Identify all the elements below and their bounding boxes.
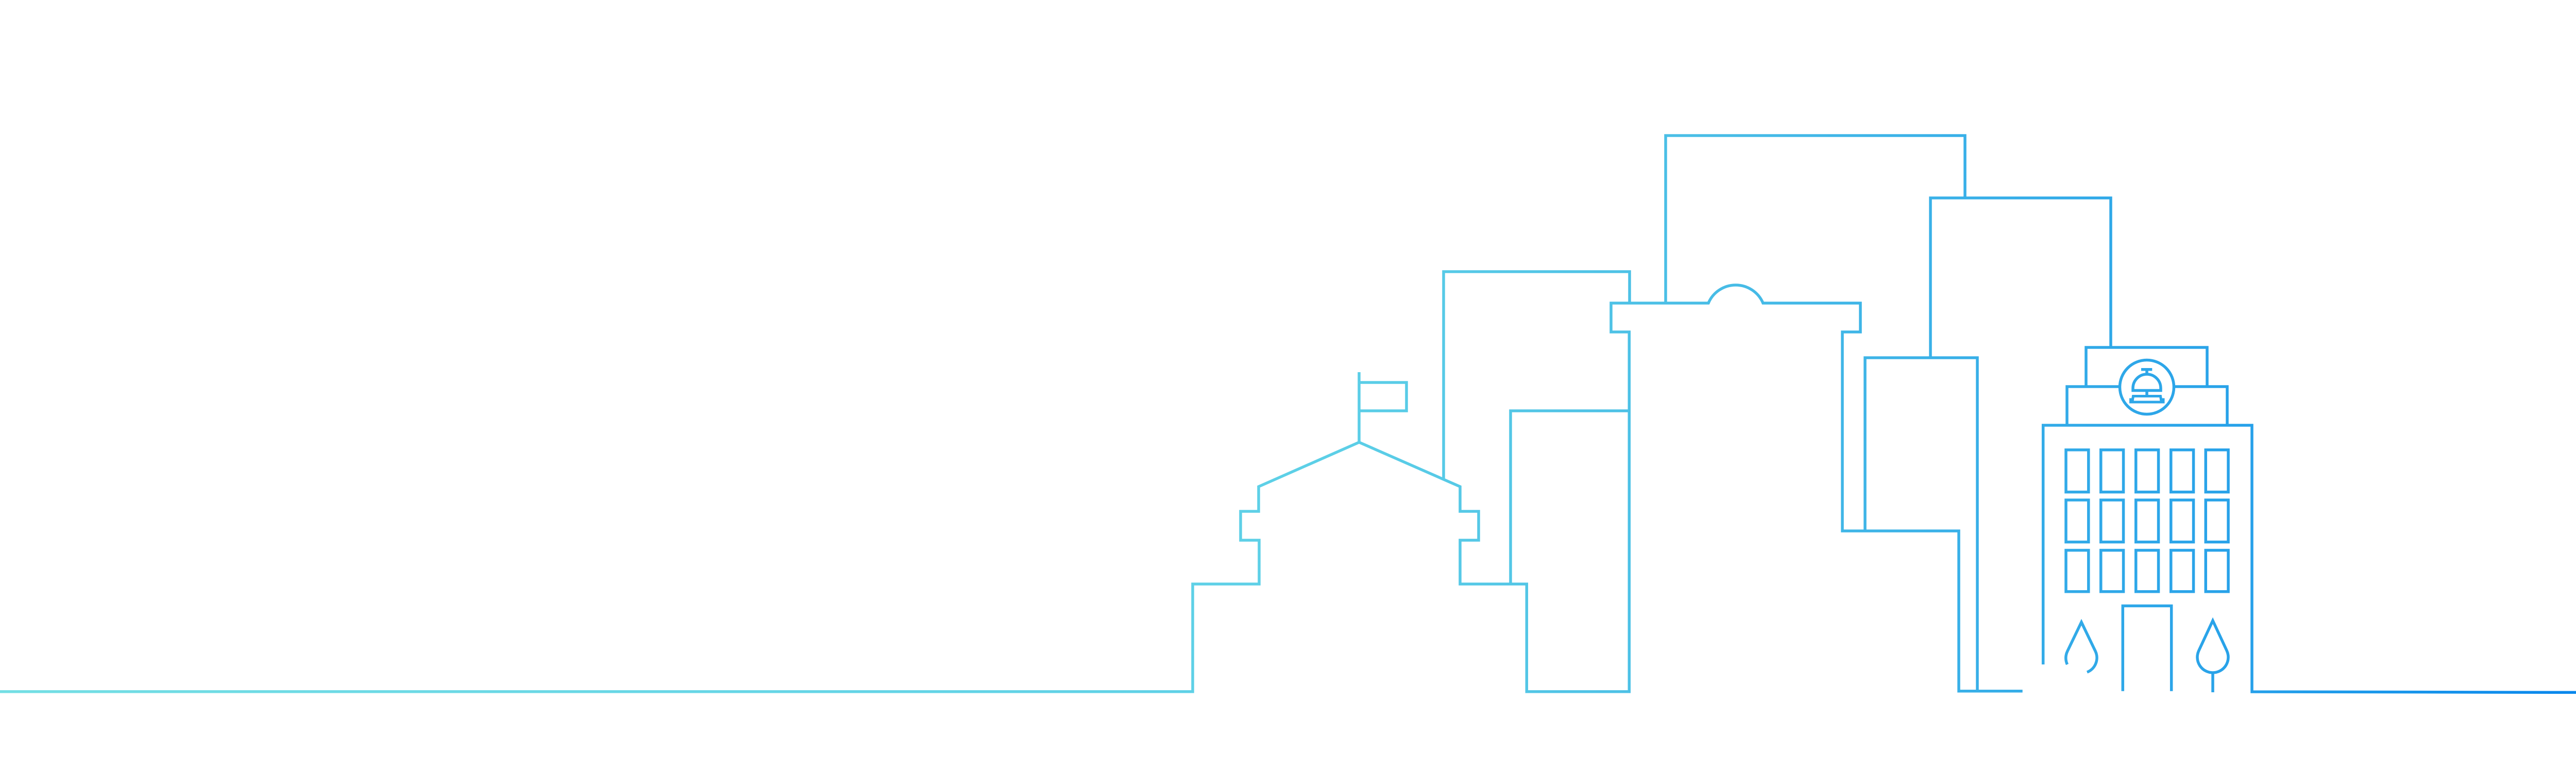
tall block behind hotel (1930, 198, 2111, 358)
right tree (2197, 621, 2228, 692)
tallest tower behind dome (1666, 136, 1965, 303)
hotel door (2123, 606, 2172, 691)
tall block behind gable (1444, 272, 1630, 479)
hotel windows (2066, 450, 2228, 592)
hotel main body and right ground line (2043, 425, 2576, 692)
flag on gabled building (1359, 372, 1406, 442)
hotel middle storey (2067, 387, 2227, 425)
ground line, gabled building and dome tower outline (0, 285, 2023, 692)
stepped tower right of dome (1865, 358, 1977, 691)
icon: reception bell badge (2120, 360, 2174, 414)
hotel upper storey (2086, 347, 2207, 387)
left tree (2066, 622, 2097, 672)
line art group (0, 136, 2576, 692)
inner block beside tower (1511, 411, 1629, 584)
